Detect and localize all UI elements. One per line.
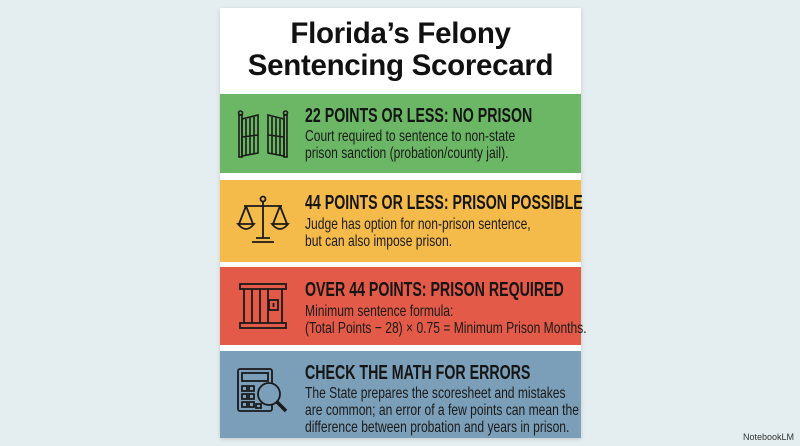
- text: Minimum sentence formula:: [305, 303, 453, 320]
- panel: prison possible: [220, 180, 581, 262]
- text: [305, 216, 531, 250]
- heading: CHECK THE MATH FOR ERRORS: [305, 362, 530, 384]
- icon: prison cell: [239, 283, 287, 329]
- title: Sentencing Scorecard: [248, 49, 553, 82]
- text: [305, 128, 515, 162]
- text: [305, 303, 587, 337]
- title: [248, 17, 553, 82]
- title: Florida’s Felony: [290, 17, 511, 50]
- heading: 44 POINTS OR LESS: PRISON POSSIBLE: [305, 192, 583, 214]
- text: The State prepares the scoresheet and mistakes: [305, 385, 566, 402]
- text: prison sanction (probation/county jail).: [305, 145, 508, 162]
- icon: scales: [236, 196, 290, 243]
- text: Judge has option for non-prison sentence,: [305, 216, 531, 233]
- text: difference between probation and years in prison.: [305, 419, 569, 436]
- panel: prison required: [220, 267, 581, 345]
- panel: check math: [220, 351, 581, 438]
- heading: 22 POINTS OR LESS: NO PRISON: [305, 105, 532, 127]
- text: but can also impose prison.: [305, 233, 452, 250]
- text: [305, 385, 579, 436]
- text: are common; an error of a few points can mean the: [305, 402, 579, 419]
- card: [220, 8, 581, 438]
- watermark: NotebookLM: [743, 432, 794, 442]
- icon: calculator with magnifier: [237, 368, 288, 412]
- heading: OVER 44 POINTS: PRISON REQUIRED: [305, 279, 564, 301]
- icon: open gate: [238, 110, 288, 158]
- text: Court required to sentence to non-state: [305, 128, 515, 145]
- text: (Total Points − 28) × 0.75 = Minimum Prison Months.: [305, 320, 587, 337]
- panel: no prison: [220, 94, 581, 173]
